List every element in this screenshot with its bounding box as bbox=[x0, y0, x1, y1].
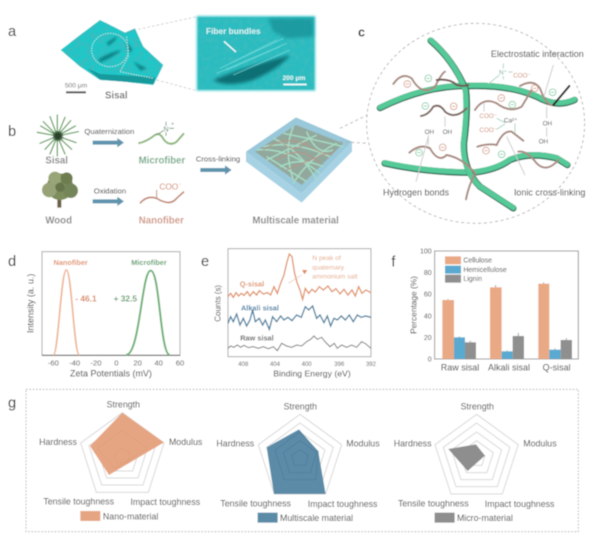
dashed frame bbox=[26, 389, 578, 532]
chemical group labels: OH bbox=[425, 129, 434, 136]
panel e: XPS chart bbox=[201, 249, 377, 379]
icon: microfiber bbox=[138, 121, 184, 144]
scale bar 500 µm: 500 μm bbox=[65, 83, 88, 90]
x axis ticks bbox=[238, 362, 377, 368]
axis labels: Tensile toughness bbox=[398, 499, 469, 509]
axis labels: Modulus bbox=[169, 437, 203, 447]
panel b: preparation scheme bbox=[8, 115, 352, 226]
label Raw sisal: Raw sisal bbox=[240, 333, 274, 342]
x axis ticks: -60 bbox=[48, 358, 59, 367]
chart frame bbox=[42, 252, 180, 355]
y axis ticks bbox=[420, 248, 432, 364]
label b: b bbox=[8, 124, 16, 140]
label f: f bbox=[391, 255, 396, 271]
label Microfiber: Microfiber bbox=[131, 258, 167, 267]
icon: microfiber: + bbox=[171, 121, 174, 127]
inset: fiber bundles micrograph bbox=[197, 16, 315, 91]
x axis labels: Alkali sisal bbox=[488, 363, 530, 373]
label Nanofiber: Nanofiber bbox=[54, 258, 88, 267]
chemical group labels: N⁺ bbox=[499, 70, 507, 77]
y axis label: Intensity (a. u.) bbox=[26, 274, 36, 333]
magnified circle bbox=[367, 23, 585, 223]
x axis ticks: 392 bbox=[366, 362, 377, 368]
y axis ticks: 20 bbox=[424, 335, 432, 342]
label Alkali sisal: Alkali sisal bbox=[241, 303, 279, 312]
label Fiber bundles: Fiber bundles bbox=[206, 26, 261, 36]
x axis ticks: 60 bbox=[176, 358, 184, 367]
x axis ticks: 396 bbox=[334, 362, 345, 368]
chemical group labels: COO⁻ bbox=[479, 113, 497, 120]
radar: nano-material bbox=[39, 400, 203, 507]
annotation: N peak bbox=[288, 255, 358, 283]
axis labels: Tensile toughness bbox=[220, 499, 292, 509]
x axis ticks: -20 bbox=[90, 358, 102, 367]
microfiber curve bbox=[126, 271, 170, 355]
chemical group labels: COO⁻ bbox=[513, 72, 531, 79]
label Oxidation: Oxidation bbox=[94, 186, 126, 195]
legend: nano-material: Nano-material bbox=[103, 511, 158, 521]
label Quaternization: Quaternization bbox=[84, 127, 134, 136]
connector lines bbox=[416, 63, 553, 182]
axis labels bbox=[39, 400, 203, 507]
arrow: cross-linking bbox=[200, 165, 232, 175]
axis labels: Impact toughness bbox=[485, 499, 555, 509]
bars bbox=[442, 284, 572, 359]
charge symbols bbox=[404, 75, 556, 158]
label d: d bbox=[8, 254, 16, 270]
legend: Cellulose bbox=[463, 258, 492, 265]
axis labels: Hardness bbox=[39, 437, 77, 447]
Q-sisal trace bbox=[228, 254, 371, 299]
axis labels: Strength bbox=[107, 400, 140, 410]
green fibers bbox=[380, 40, 575, 208]
icon: sisal plant bbox=[37, 115, 78, 156]
value +32.5: + 32.5 bbox=[114, 294, 137, 304]
label Hydrogen bonds: Hydrogen bonds bbox=[383, 188, 449, 198]
radar: micro-material bbox=[394, 401, 557, 509]
x axis labels: Raw sisal bbox=[441, 363, 479, 373]
chart frame bbox=[435, 251, 578, 359]
label Ionic cross-linking: Ionic cross-linking bbox=[514, 188, 585, 198]
panel c: interaction schematic bbox=[340, 23, 585, 223]
axis labels bbox=[216, 401, 380, 509]
x axis ticks: 408 bbox=[238, 362, 249, 368]
nanofiber curve bbox=[53, 270, 79, 355]
zoom lines bbox=[138, 17, 197, 91]
scale bar 500 µm bbox=[65, 83, 88, 93]
axis labels: Impact toughness bbox=[308, 499, 378, 509]
label a: a bbox=[8, 24, 17, 40]
scale bar 200 µm: 200 μm bbox=[282, 75, 306, 82]
annotation: N peak: N peak of bbox=[312, 255, 341, 262]
chemical group labels: OH bbox=[443, 129, 452, 136]
label Sisal: Sisal bbox=[105, 90, 128, 101]
y axis ticks: 80 bbox=[424, 270, 432, 277]
radar: multiscale material bbox=[216, 401, 380, 509]
label c: c bbox=[358, 26, 365, 40]
axis labels: Hardness bbox=[216, 439, 255, 449]
x axis label: Binding Energy (eV) bbox=[273, 369, 351, 379]
y axis label: Counts (s) bbox=[214, 285, 223, 322]
icon: nanofiber: COO bbox=[159, 181, 179, 191]
chemical group labels: OH bbox=[543, 120, 552, 127]
panel f: composition bar chart bbox=[391, 248, 578, 373]
x axis ticks: 404 bbox=[270, 362, 281, 368]
annotation: N peak: quaternary bbox=[312, 264, 345, 271]
label Q-sisal: Q-sisal bbox=[240, 280, 264, 289]
legend: micro-material: Micro-material bbox=[457, 513, 513, 523]
chart frame bbox=[228, 249, 371, 357]
legend bbox=[445, 256, 507, 283]
arrow: oxidation bbox=[93, 197, 124, 206]
Raw sisal trace bbox=[228, 336, 371, 351]
legend: Lignin bbox=[463, 276, 482, 283]
icon: microfiber: N bbox=[163, 124, 169, 133]
arrow bbox=[224, 41, 236, 52]
label g: g bbox=[8, 396, 16, 412]
axis labels: Hardness bbox=[394, 439, 432, 449]
icon: nanofiber bbox=[140, 181, 184, 203]
Alkali sisal trace bbox=[228, 306, 371, 329]
x axis ticks: 40 bbox=[154, 358, 163, 367]
chemical group labels: COO⁻ bbox=[479, 127, 497, 134]
axis labels: Strength bbox=[461, 401, 494, 411]
axis labels bbox=[394, 401, 557, 509]
panel a: sisal micro-CT bbox=[8, 16, 315, 101]
x axis ticks: -40 bbox=[69, 358, 80, 367]
label Sisal: Sisal bbox=[45, 155, 68, 166]
y axis ticks: 40 bbox=[424, 313, 432, 320]
chemical group labels: OH bbox=[539, 139, 548, 146]
annotation: N peak: ammonium salt bbox=[312, 274, 358, 281]
label Wood: Wood bbox=[45, 215, 72, 226]
label Microfiber: Microfiber bbox=[139, 155, 186, 166]
panel g: radar charts bbox=[8, 389, 578, 532]
axis labels: Modulus bbox=[523, 439, 557, 449]
chemical group labels: Ca²⁺ bbox=[504, 118, 517, 125]
y axis ticks: 100 bbox=[420, 248, 432, 255]
chemical group labels bbox=[425, 70, 552, 146]
label Nanofiber: Nanofiber bbox=[139, 215, 184, 226]
x axis ticks bbox=[48, 358, 184, 367]
nanofiber chains bbox=[393, 72, 569, 199]
x axis ticks: 0 bbox=[114, 358, 118, 367]
arrow: quaternization bbox=[93, 138, 124, 147]
icon: tree bbox=[42, 172, 78, 208]
label e: e bbox=[201, 254, 209, 270]
label Cross-linking: Cross-linking bbox=[196, 154, 240, 163]
x axis ticks: 20 bbox=[133, 358, 142, 367]
error bars bbox=[448, 282, 566, 351]
value -46.1: - 46.1 bbox=[75, 294, 97, 304]
x axis label: Zeta Potentials (mV) bbox=[70, 369, 152, 379]
axis labels: Modulus bbox=[346, 439, 380, 449]
y axis label: Percentage (%) bbox=[408, 276, 418, 334]
axis labels: Impact toughness bbox=[130, 497, 201, 507]
label Multiscale material: Multiscale material bbox=[252, 215, 339, 226]
icon: sisal 3D scan bbox=[61, 20, 163, 85]
legend: Hemicellulose bbox=[463, 267, 507, 274]
axis labels: Strength bbox=[284, 401, 317, 411]
legend: micro-material bbox=[435, 513, 513, 523]
x axis labels: Q-sisal bbox=[543, 363, 571, 373]
x axis labels bbox=[441, 363, 571, 373]
legend: multiscale material: Multiscale material bbox=[280, 513, 353, 523]
label Electrostatic interaction: Electrostatic interaction bbox=[491, 49, 584, 59]
y axis ticks: 0 bbox=[428, 357, 432, 364]
icon: multiscale material block bbox=[246, 117, 352, 203]
legend: nano-material bbox=[80, 511, 158, 521]
x axis ticks: 400 bbox=[302, 362, 312, 368]
y axis ticks: 60 bbox=[424, 292, 432, 299]
panel d: zeta potential chart bbox=[8, 252, 184, 379]
axis labels: Tensile toughness bbox=[43, 497, 115, 507]
icon: nanofiber: - bbox=[179, 181, 181, 187]
